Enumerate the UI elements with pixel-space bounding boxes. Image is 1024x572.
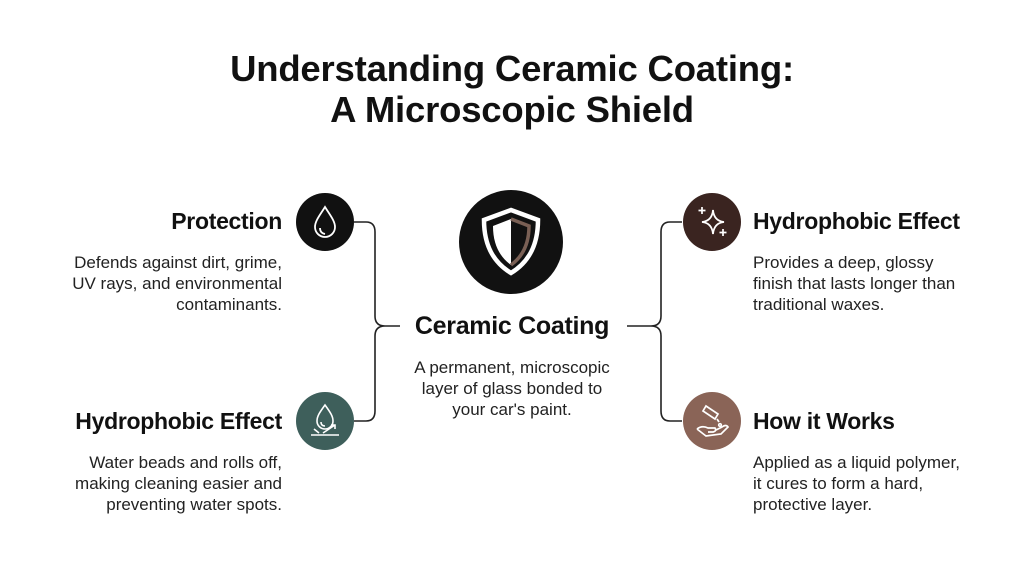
text: hydrophobic right: Provides a deep, glossy (753, 253, 934, 272)
title (230, 48, 794, 130)
center icon: shield (459, 190, 563, 294)
center text: layer of glass bonded to (422, 379, 602, 398)
icon: hand applying liquid (683, 392, 741, 450)
text: hydrophobic left: making cleaning easier and (75, 474, 282, 493)
center heading: Ceramic Coating (415, 312, 609, 340)
text: protection: Defends against dirt, grime, (74, 253, 282, 272)
heading: hydrophobic effect: Hydrophobic Effect (75, 408, 282, 434)
heading: how it works: How it Works (753, 408, 895, 434)
center text: A permanent, microscopic (414, 358, 610, 377)
text: how it works: it cures to form a hard, (753, 474, 923, 493)
panel: hydrophobic right (753, 208, 960, 314)
text: protection: UV rays, and environmental (72, 274, 282, 293)
text: protection (72, 253, 282, 314)
center text (414, 358, 610, 419)
text: hydrophobic right: finish that lasts longer than (753, 274, 955, 293)
panel: protection (72, 208, 282, 314)
heading: hydrophobic effect right: Hydrophobic Effect (753, 208, 960, 234)
text: how it works: Applied as a liquid polymer, (753, 453, 960, 472)
text: hydrophobic right (753, 253, 955, 314)
icon: water beading (296, 392, 354, 450)
heading: protection: Protection (171, 208, 282, 234)
text: protection: contaminants. (176, 295, 282, 314)
icon: sparkles (683, 193, 741, 251)
text: hydrophobic right: traditional waxes. (753, 295, 884, 314)
text: how it works: protective layer. (753, 495, 872, 514)
text: hydrophobic left: Water beads and rolls off, (89, 453, 282, 472)
text: how it works (753, 453, 960, 514)
text: hydrophobic left (75, 453, 282, 514)
panel: how it works (753, 408, 960, 514)
title: Understanding Ceramic Coating: (230, 48, 794, 89)
title: A Microscopic Shield (330, 89, 694, 130)
icon: water drop (296, 193, 354, 251)
center text: your car's paint. (452, 400, 572, 419)
panel: hydrophobic left (75, 408, 282, 514)
text: hydrophobic left: preventing water spots. (106, 495, 282, 514)
